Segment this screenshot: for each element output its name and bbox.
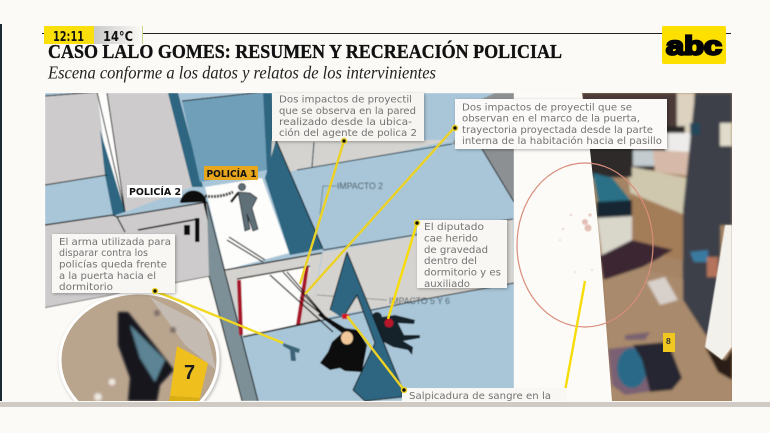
callout: salpicadura: Salpicadura de sangre en la [409, 391, 551, 402]
inset photo: gun and marker 7 [58, 293, 222, 401]
inset photo: gun and marker 7: 7 [184, 362, 195, 384]
callout: el diputado: auxiliado [424, 279, 470, 290]
impact labels: IMPACTO 5 Y 6 [389, 296, 450, 306]
dark teal wedge [265, 140, 323, 255]
top-left walls [45, 92, 274, 225]
black blob policia 2 [180, 191, 233, 222]
callout: el arma [52, 234, 175, 294]
trajectory lines [227, 237, 333, 332]
time and temperature badge [44, 26, 143, 45]
impact labels [320, 181, 450, 306]
left edge bar [0, 24, 2, 401]
gun [283, 343, 300, 361]
callout: el diputado: El diputado [424, 222, 484, 233]
callout: el arma: El arma utilizada para [59, 237, 171, 248]
time and temperature badge: 12:11 [53, 29, 84, 45]
photo: crime scene bedroom [514, 93, 732, 401]
centre grey wall [270, 93, 514, 202]
callout: el diputado: dentro del [424, 256, 477, 267]
blood spatter [559, 214, 593, 273]
red circle [517, 163, 653, 327]
callout: salpicadura [402, 388, 567, 402]
label: policia 2: POLICÍA 2 [129, 186, 181, 198]
evidence marker 8 [663, 333, 675, 352]
lower-left grey panels [45, 202, 212, 308]
callout: impactos en la pared [272, 93, 424, 144]
evidence marker 8: 8 [666, 336, 671, 346]
callout: el diputado [414, 220, 507, 290]
time and temperature badge: 14°C [103, 30, 133, 45]
grey band right [310, 219, 514, 322]
grey-blue wall strip [207, 202, 258, 401]
callout: impactos en la pared: realizado desde la ubica- [279, 117, 413, 128]
bottom band [0, 402, 770, 407]
callout: el diputado: de gravedad [424, 245, 488, 256]
illustration: police recreation floor plan [45, 92, 514, 401]
callout: el arma: dormitorio [59, 282, 113, 293]
callout: impactos en la pared: que se observa en la pared [279, 106, 416, 117]
impact labels: IMPACTO 2 [337, 181, 383, 191]
corridor white floor [205, 178, 289, 270]
callout: el arma: disparar contra los [59, 248, 148, 259]
callout: impactos en el marco: observan en el marco de la puerta, [462, 114, 640, 124]
teal wall triangle [330, 252, 402, 401]
figure: policia 1 [231, 184, 258, 231]
callout: el diputado: cae herido [424, 234, 478, 244]
callout: impactos en la pared: ción del agente de polica 2 [279, 127, 417, 139]
callout: el arma: a la puerta hacia el [59, 271, 156, 282]
title: CASO LALO GOMES: RESUMEN Y RECREACIÓN POLICIAL [48, 39, 562, 63]
figure: wounded deputy [372, 312, 420, 355]
top header rule [42, 32, 731, 34]
callout: impactos en la pared: Dos impactos de proyectil [279, 94, 412, 106]
callout: el arma: policías queda frente [59, 258, 167, 270]
callout: impactos en el marco: trayectoria proyectada desde la parte [462, 125, 653, 136]
callout: el diputado: dormitorio y es [424, 268, 501, 278]
cream floor [45, 276, 245, 401]
logo: abc: abc [666, 30, 722, 60]
logo: abc [662, 26, 726, 64]
white wall [514, 93, 612, 401]
callout: impactos en el marco: Dos impactos de proyectil que se [462, 102, 632, 114]
label: policia 1: POLICÍA 1 [206, 168, 256, 180]
callout: impactos en el marco [452, 99, 667, 149]
callout: impactos en el marco: interna de la habitación hacia el pasillo [462, 135, 662, 147]
subtitle: Escena conforme a los datos y relatos de los intervinientes [47, 62, 436, 82]
door frame and opening [225, 253, 322, 337]
leader lines [155, 128, 585, 391]
figure: shooter [318, 313, 367, 372]
